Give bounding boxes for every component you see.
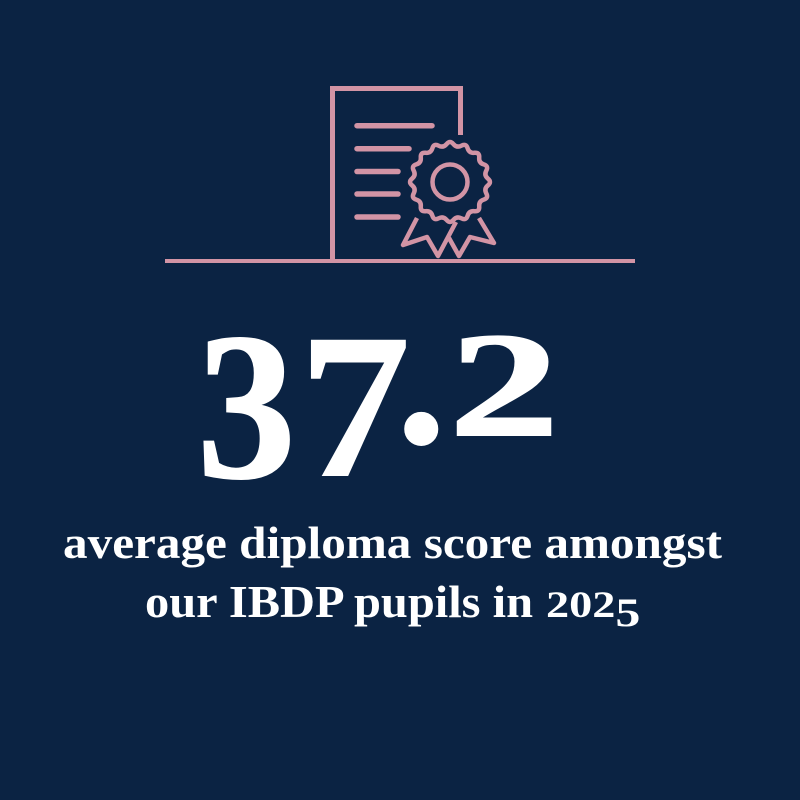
- caption: 202: [546, 585, 615, 626]
- baseline rule: [165, 259, 635, 263]
- caption: [63, 517, 723, 635]
- big number: 37.2: 7: [298, 291, 411, 522]
- big number: 37.2: [197, 257, 559, 523]
- caption: 5: [615, 591, 640, 635]
- big number: 37.2: 3: [197, 290, 296, 523]
- caption: our IBDP pupils in: [145, 576, 533, 627]
- big number: 37.2: 2: [449, 302, 559, 467]
- rosette seal: [410, 142, 490, 222]
- rosette ribbons: [403, 218, 494, 256]
- certificate text lines: [357, 126, 432, 217]
- decimal point: .: [395, 257, 448, 489]
- icon: diploma certificate with rosette: [165, 88, 635, 261]
- caption: average diploma score amongst: [63, 517, 723, 568]
- certificate page outline: [332, 88, 460, 261]
